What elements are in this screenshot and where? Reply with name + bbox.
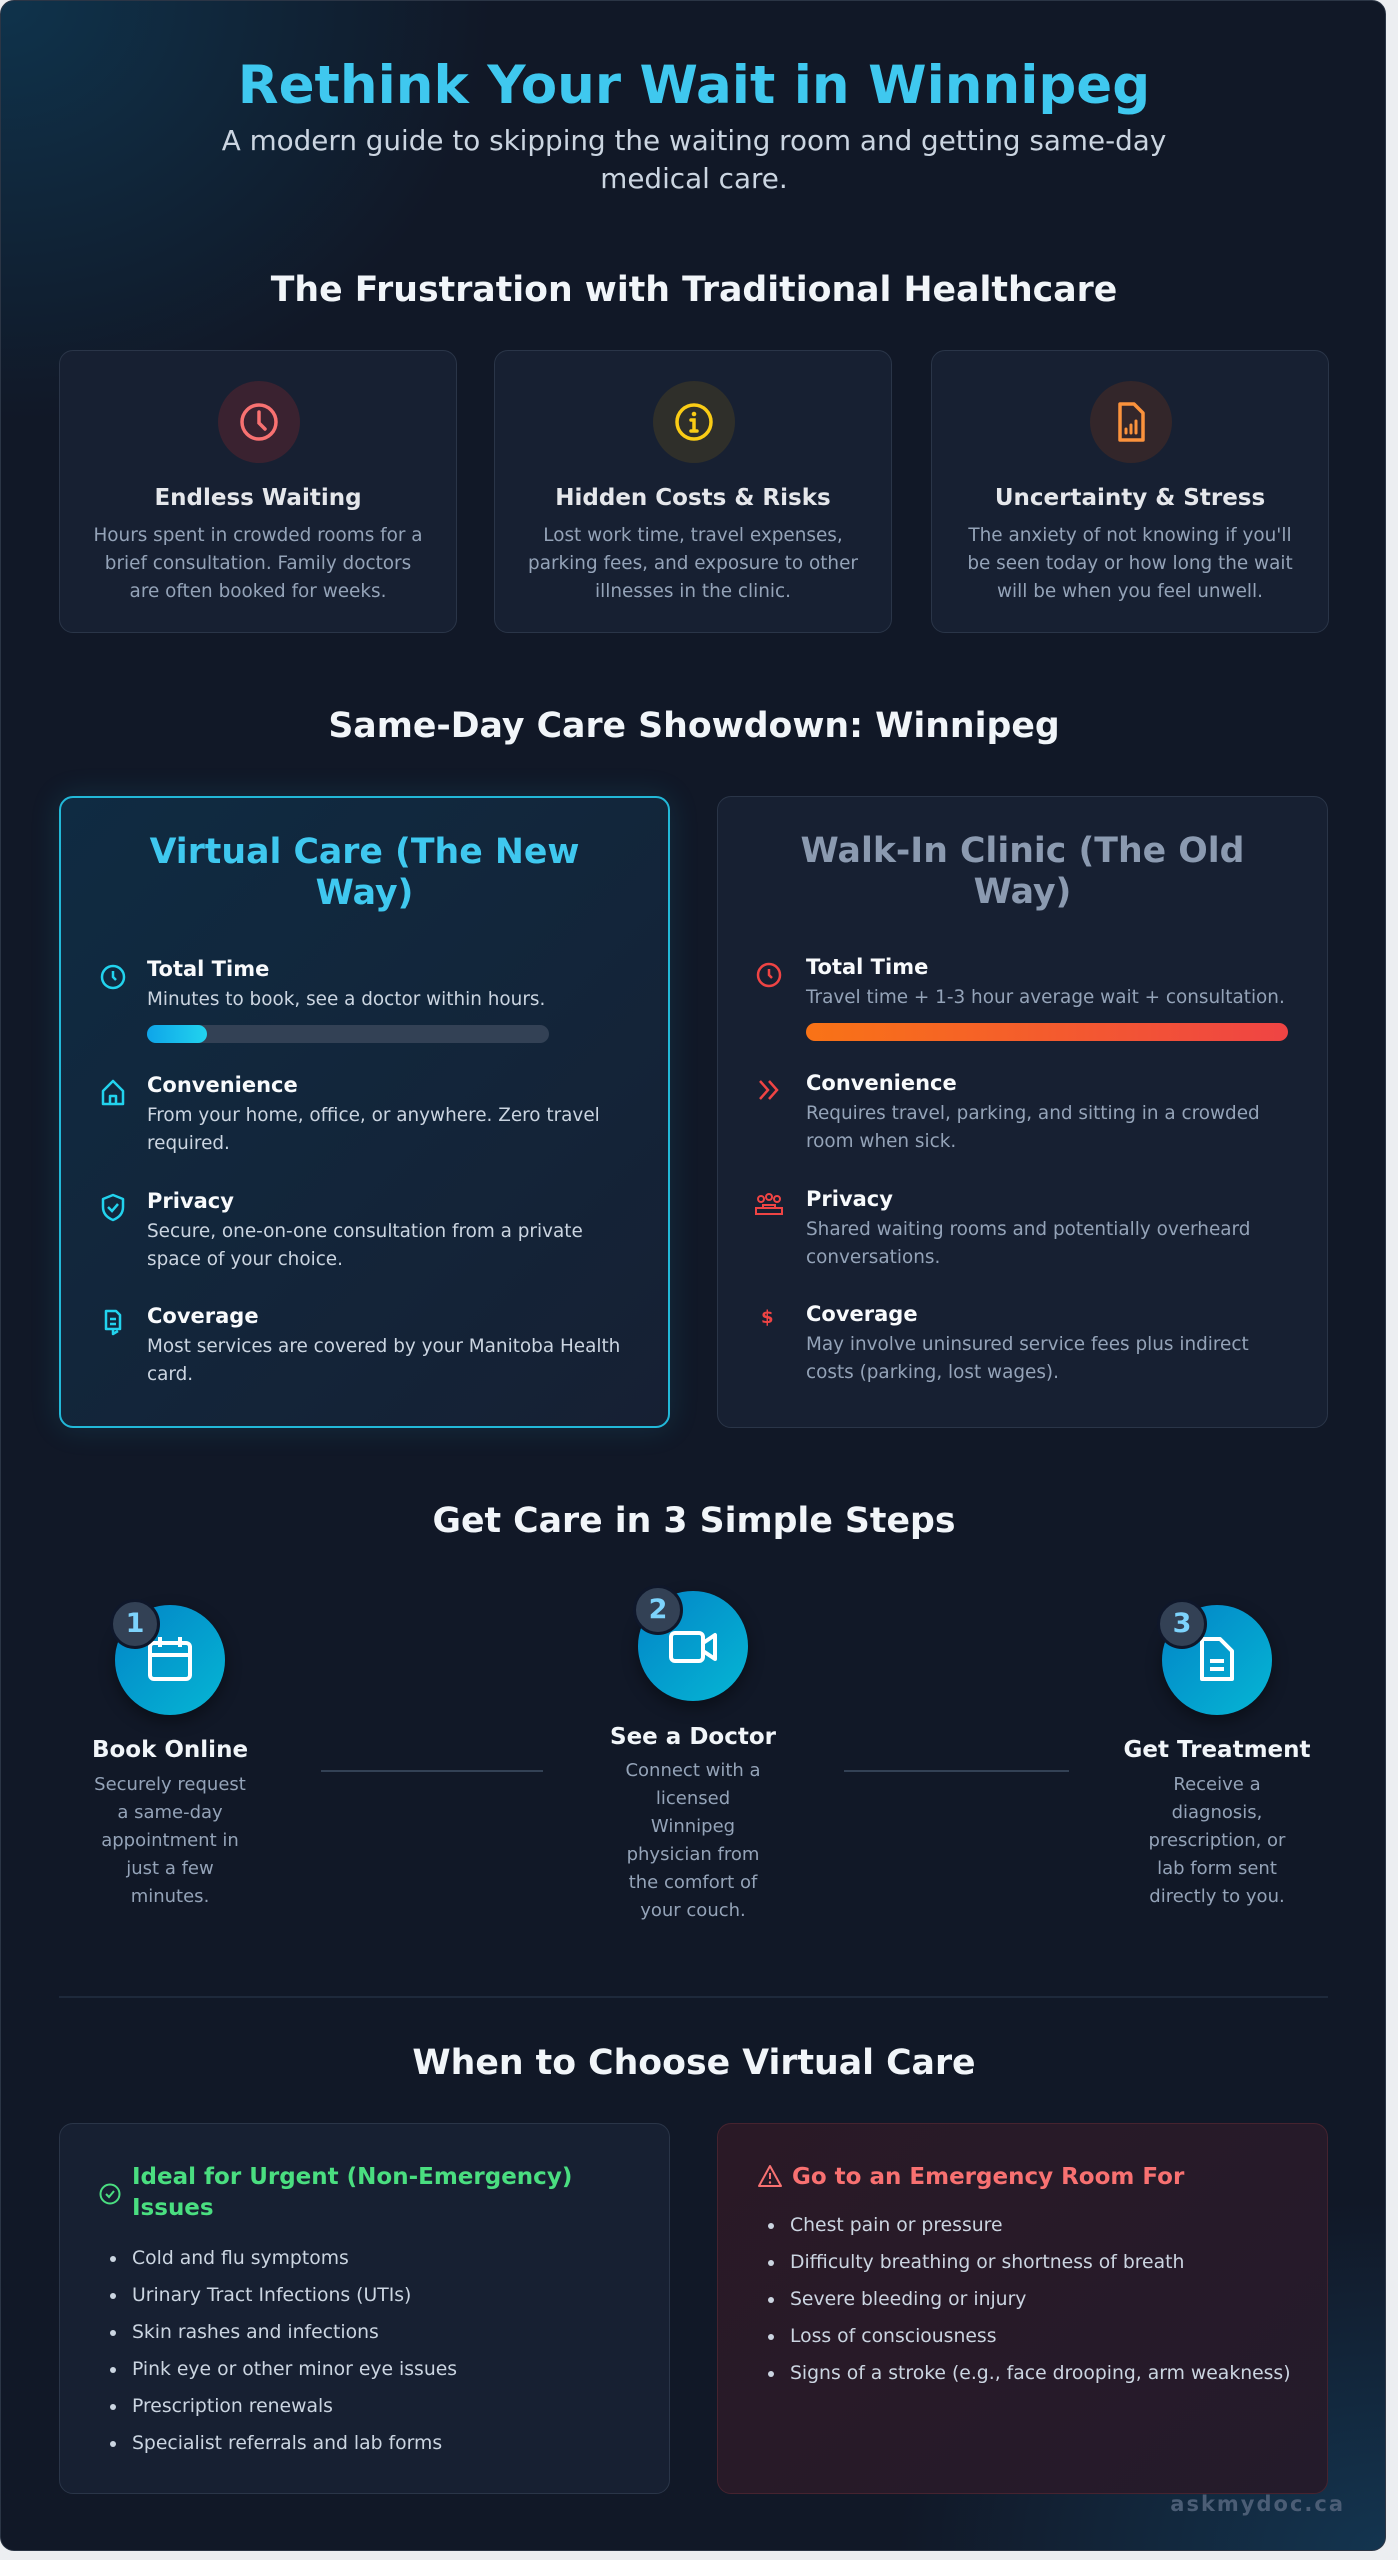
title: Rethink Your Wait in Winnipeg	[238, 55, 1150, 116]
panel title: Walk-In Clinic (The Old	[801, 831, 1244, 871]
list	[768, 2215, 1291, 2384]
list: Chest pain or pressure	[790, 2215, 1003, 2236]
step 2: see a doctor: physician from	[627, 1844, 759, 1865]
panel: virtual care: space of your choice.	[147, 1249, 343, 1270]
panel: endless waiting	[59, 350, 457, 633]
panel heading: Go to an Emergency Room For	[792, 2164, 1184, 2190]
list: Urinary Tract Infections (UTIs)	[132, 2285, 411, 2306]
panel: virtual care: Total Time	[147, 957, 269, 981]
card title: Endless Waiting	[154, 485, 362, 511]
panel: walk-in clinic: Travel time + 1-3 hour average wait + consultation.	[806, 987, 1285, 1008]
panel: virtual care: Coverage	[147, 1304, 259, 1328]
heading: frustration: The Frustration with Traditional Healthcare	[271, 270, 1117, 310]
connector line 1	[321, 1770, 543, 1772]
list: Pink eye or other minor eye issues	[132, 2359, 457, 2380]
panel: virtual care: Secure, one-on-one consultation from a private	[147, 1221, 583, 1242]
panel: virtual care: card.	[147, 1364, 193, 1385]
card text: illnesses in the clinic.	[595, 581, 791, 602]
panel: virtual care: Convenience	[147, 1073, 298, 1097]
panel title: Way)	[316, 873, 413, 913]
panel: virtual care: From your home, office, or anywhere. Zero travel	[147, 1105, 600, 1126]
icon: check circle	[100, 2184, 120, 2204]
subtitle: medical care.	[600, 162, 788, 195]
card text: The anxiety of not knowing if you'll	[968, 525, 1292, 546]
panel title	[801, 831, 1244, 912]
panel: walk-in clinic: Total Time	[806, 955, 928, 979]
icon: clock	[218, 381, 300, 463]
step 3: get treatment: diagnosis,	[1172, 1802, 1262, 1823]
step 3: get treatment: Get Treatment	[1123, 1737, 1311, 1763]
list: Severe bleeding or injury	[790, 2289, 1026, 2310]
list: Difficulty breathing or shortness of breath	[790, 2252, 1184, 2273]
row: coverage	[104, 1304, 620, 1385]
card title: Uncertainty & Stress	[995, 485, 1265, 511]
card text: will be when you feel unwell.	[997, 581, 1263, 602]
step 3: get treatment: prescription, or	[1149, 1830, 1285, 1851]
connector line 2	[844, 1770, 1069, 1772]
badge 3	[1157, 1599, 1207, 1649]
card text: be seen today or how long the wait	[967, 553, 1293, 574]
panel: walk-in clinic: room when sick.	[806, 1131, 956, 1152]
panel: virtual care: Privacy	[147, 1189, 234, 1213]
row: coverage	[761, 1302, 1249, 1383]
panel: walk-in clinic: conversations.	[806, 1247, 940, 1268]
list: Signs of a stroke (e.g., face drooping, arm weakness)	[790, 2363, 1291, 2384]
card text	[528, 525, 858, 602]
list: Specialist referrals and lab forms	[132, 2433, 442, 2454]
icon: video	[638, 1591, 748, 1701]
card text	[967, 525, 1293, 602]
step 3: get treatment: lab form sent	[1157, 1858, 1277, 1879]
row: convenience	[102, 1073, 600, 1154]
step 2: see a doctor: Winnipeg	[651, 1816, 735, 1837]
step 3: get treatment: directly to you.	[1149, 1886, 1285, 1907]
list: Cold and flu symptoms	[132, 2248, 349, 2269]
step 2: see a doctor: your couch.	[640, 1900, 746, 1921]
subtitle	[222, 124, 1166, 195]
panel: walk-in clinic: costs (parking, lost wages).	[806, 1362, 1059, 1383]
panel: virtual care: Minutes to book, see a doctor within hours.	[147, 989, 545, 1010]
step 2: see a doctor: the comfort of	[629, 1872, 757, 1893]
step 3: get treatment	[1123, 1602, 1311, 1907]
card text: brief consultation. Family doctors	[105, 553, 411, 574]
step 1: book online: Securely request	[94, 1774, 246, 1795]
panel title	[150, 832, 579, 913]
row: convenience	[759, 1071, 1260, 1152]
row: total time	[756, 955, 1288, 1041]
panel heading	[132, 2164, 572, 2221]
list: Loss of consciousness	[790, 2326, 996, 2347]
card text: Hours spent in crowded rooms for a	[93, 525, 423, 546]
panel: ideal for virtual care	[59, 2123, 670, 2494]
subtitle: A modern guide to skipping the waiting room and getting same-day	[222, 124, 1166, 157]
panel title: Way)	[974, 872, 1071, 912]
step 2: see a doctor	[610, 1588, 776, 1921]
panel: virtual care: Most services are covered by your Manitoba Health	[147, 1336, 620, 1357]
panel: walk-in clinic: May involve uninsured service fees plus indirect	[806, 1334, 1249, 1355]
list: Prescription renewals	[132, 2396, 333, 2417]
panel: hidden costs	[494, 350, 892, 633]
heading: steps: Get Care in 3 Simple Steps	[432, 1501, 956, 1541]
step 1: book online: appointment in	[101, 1830, 239, 1851]
step 1: book online: just a few	[126, 1858, 214, 1879]
badge 1: 1	[126, 1608, 144, 1639]
panel: walk-in clinic	[717, 796, 1328, 1428]
card text: parking fees, and exposure to other	[528, 553, 858, 574]
badge 1	[110, 1599, 160, 1649]
panel: walk-in clinic: $	[761, 1307, 774, 1328]
heading: showdown: Same-Day Care Showdown: Winnipeg	[328, 706, 1060, 746]
list: Skin rashes and infections	[132, 2322, 379, 2343]
icon: calendar	[115, 1605, 225, 1715]
list	[110, 2248, 457, 2454]
panel: virtual care: required.	[147, 1133, 230, 1154]
badge 3: 3	[1173, 1608, 1191, 1639]
card text: Lost work time, travel expenses,	[543, 525, 843, 546]
footer brand: askmydoc.ca	[1170, 2492, 1345, 2516]
badge 2	[633, 1585, 683, 1635]
heading: when to choose: When to Choose Virtual Care	[412, 2043, 976, 2083]
icon: warning	[758, 2165, 782, 2187]
card title: Hidden Costs & Risks	[555, 485, 831, 511]
panel title: Virtual Care (The New	[150, 832, 579, 872]
panel heading: Ideal for Urgent (Non-Emergency)	[132, 2164, 572, 2190]
step 1: book online: minutes.	[131, 1886, 209, 1907]
step 2: see a doctor: licensed	[656, 1788, 730, 1809]
card text	[93, 525, 423, 602]
step 1: book online: Book Online	[92, 1737, 248, 1763]
panel heading: Issues	[132, 2195, 214, 2221]
row: total time	[100, 957, 549, 1043]
step 1: book online	[92, 1602, 248, 1907]
panel: walk-in clinic: Shared waiting rooms and potentially overheard	[806, 1219, 1250, 1240]
panel: walk-in clinic: Requires travel, parking, and sitting in a crowded	[806, 1103, 1260, 1124]
panel: uncertainty	[931, 350, 1329, 633]
icon: document chart	[1090, 381, 1172, 463]
panel: emergency room	[717, 2123, 1328, 2494]
panel: walk-in clinic: Convenience	[806, 1071, 957, 1095]
panel: walk-in clinic: Privacy	[806, 1187, 893, 1211]
row: privacy	[755, 1187, 1250, 1268]
icon: document	[1162, 1605, 1272, 1715]
step 2: see a doctor: See a Doctor	[610, 1724, 776, 1750]
icon: info	[653, 381, 735, 463]
panel: walk-in clinic: Coverage	[806, 1302, 918, 1326]
step 3: get treatment: Receive a	[1173, 1774, 1261, 1795]
step 2: see a doctor: Connect with a	[625, 1760, 761, 1781]
card text: are often booked for weeks.	[130, 581, 386, 602]
step 1: book online: a same-day	[117, 1802, 223, 1823]
badge 2: 2	[649, 1594, 667, 1625]
panel: virtual care	[59, 796, 670, 1428]
row: privacy	[102, 1189, 583, 1270]
